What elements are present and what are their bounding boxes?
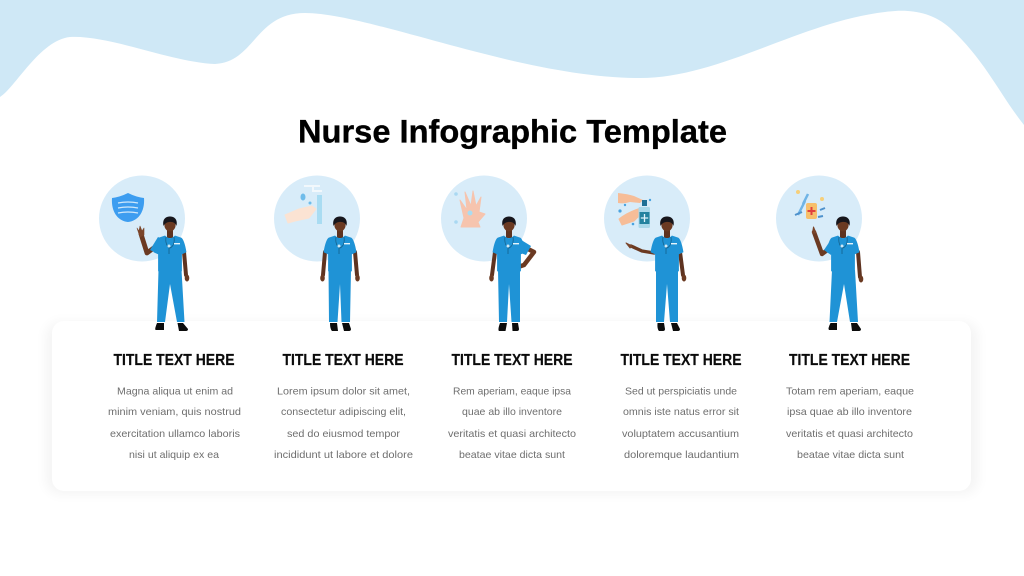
- text block 3: veritatis et quasi architecto: [448, 428, 576, 440]
- text block 5: beatae vitae dicta sunt: [797, 449, 904, 461]
- text block 5: Totam rem aperiam, eaque: [786, 386, 914, 398]
- column 2: hand wash nurse: [274, 176, 360, 331]
- column 4: sanitizer nurse: [604, 176, 690, 331]
- icon: face mask: [112, 193, 144, 222]
- text block 5: [786, 352, 914, 461]
- icon circle: medicine: [776, 176, 862, 262]
- text block 4: voluptatem accusantium: [622, 428, 739, 440]
- text block 5: TITLE TEXT HERE: [789, 352, 910, 369]
- text block 1: [108, 352, 241, 461]
- nurse figure standing: [320, 216, 360, 331]
- text block 2: [274, 352, 413, 461]
- text block 1: minim veniam, quis nostrud: [108, 406, 241, 418]
- background wave: [0, 0, 1024, 125]
- icon circle: hand wash: [274, 176, 360, 262]
- icon circle: hands: [441, 176, 527, 262]
- text block 1: Magna aliqua ut enim ad: [117, 386, 233, 398]
- text block 5: ipsa quae ab illo inventore: [787, 406, 912, 418]
- text block 4: omnis iste natus error sit: [623, 406, 739, 418]
- text block 3: beatae vitae dicta sunt: [459, 449, 565, 461]
- column 5: medicine nurse: [776, 176, 863, 331]
- column 1: mask nurse: [99, 176, 189, 331]
- icon circle: mask: [99, 176, 185, 262]
- text block 2: consectetur adipiscing elit,: [281, 406, 406, 418]
- text block 2: sed do eiusmod tempor: [287, 428, 401, 440]
- icon circle: sanitizer: [604, 176, 690, 262]
- nurse figure with hand on hip: [489, 216, 534, 331]
- nurse figure pointing: [812, 216, 863, 331]
- text block 5: veritatis et quasi architecto: [786, 428, 913, 440]
- column 3: hand rub nurse: [441, 176, 534, 331]
- text block 4: [620, 352, 742, 461]
- title: Nurse Infographic Template: [298, 114, 727, 150]
- text block 4: TITLE TEXT HERE: [620, 352, 742, 369]
- text block 1: TITLE TEXT HERE: [114, 352, 234, 369]
- text block 3: TITLE TEXT HERE: [452, 352, 572, 369]
- icon: syringe and medicine bottle: [795, 190, 825, 219]
- text block 4: Sed ut perspiciatis unde: [625, 386, 737, 398]
- nurse figure waving: [137, 216, 189, 331]
- text block 4: doloremque laudantium: [624, 449, 739, 461]
- nurse figure gesturing: [626, 216, 686, 331]
- icon: scrubbing hands: [454, 191, 485, 227]
- text block 3: [448, 352, 576, 461]
- text block 3: Rem aperiam, eaque ipsa: [453, 386, 571, 398]
- panel: text card: [46, 321, 978, 494]
- text block 2: incididunt ut labore et dolore: [274, 449, 413, 461]
- text block 1: nisi ut aliquip ex ea: [129, 449, 219, 461]
- text block 2: TITLE TEXT HERE: [282, 352, 404, 369]
- text block 2: Lorem ipsum dolor sit amet,: [277, 386, 410, 398]
- icon: hands and sanitizer bottle: [618, 193, 651, 228]
- text block 1: exercitation ullamco laboris: [110, 428, 240, 440]
- text block 3: quae ab illo inventore: [462, 406, 562, 418]
- icon: hand under tap: [285, 186, 322, 224]
